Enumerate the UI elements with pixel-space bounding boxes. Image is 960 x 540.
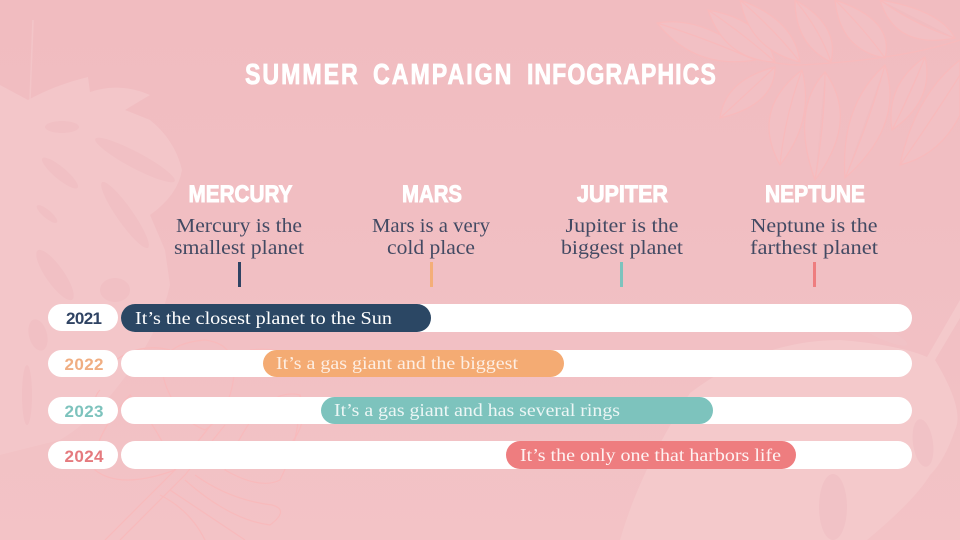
text: Neptune description: Neptune is the xyxy=(750,216,878,237)
text: Mars description: cold place xyxy=(387,238,475,259)
track: 2024 xyxy=(121,441,912,469)
year label: 2023: 2023 xyxy=(64,402,104,421)
title: SUMMER xyxy=(245,57,358,91)
column: Jupiter xyxy=(561,181,684,287)
text: Jupiter description: biggest planet xyxy=(561,238,684,259)
column: Neptune xyxy=(750,181,879,287)
tick: Jupiter xyxy=(620,262,623,287)
background: monstera leaf bottom right xyxy=(620,300,960,540)
track: 2022 xyxy=(121,350,912,377)
title: INFOGRAPHICS xyxy=(527,57,716,91)
column: Mercury xyxy=(174,181,305,287)
title: CAMPAIGN xyxy=(373,57,511,91)
row: 2023 xyxy=(48,397,912,424)
tick: Neptune xyxy=(813,262,816,287)
column: Mars xyxy=(372,181,490,287)
year label: 2024: 2024 xyxy=(64,447,104,466)
heading: Jupiter: JUPITER xyxy=(577,181,668,208)
heading: Mercury: MERCURY xyxy=(188,181,292,208)
heading: Neptune: NEPTUNE xyxy=(765,181,865,208)
background: line leaf branch top right xyxy=(657,0,960,180)
row: 2022 xyxy=(48,350,912,377)
year label: 2023 xyxy=(48,397,118,424)
text: Jupiter description: Jupiter is the xyxy=(566,216,678,237)
tick: Mercury xyxy=(238,262,241,287)
bar: 2023 xyxy=(321,397,713,424)
background: line leaf bottom centre xyxy=(94,340,310,540)
bar: 2023: It’s a gas giant and has several rings xyxy=(334,400,620,420)
row: 2021 xyxy=(48,304,912,332)
year label: 2022: 2022 xyxy=(64,355,104,374)
bar: 2021 xyxy=(121,304,431,332)
bar: 2024 xyxy=(506,441,796,469)
text: Mars description: Mars is a very xyxy=(372,216,490,237)
year label: 2021: 2021 xyxy=(66,309,102,328)
track: 2021 xyxy=(121,304,912,332)
title xyxy=(245,57,716,91)
bar: 2021: It’s the closest planet to the Sun xyxy=(135,308,392,328)
text: Mercury description: smallest planet xyxy=(174,238,305,259)
heading: Mars: MARS xyxy=(402,181,462,208)
tick: Mars xyxy=(430,262,433,287)
text: Neptune description: farthest planet xyxy=(750,238,879,259)
row: 2024 xyxy=(48,441,912,469)
track: 2023 xyxy=(121,397,912,424)
bar: 2022 xyxy=(263,350,564,377)
year label: 2024 xyxy=(48,441,118,469)
year label: 2021 xyxy=(48,304,118,331)
year label: 2022 xyxy=(48,350,118,377)
bar: 2024: It’s the only one that harbors life xyxy=(520,445,781,465)
text: Mercury description: Mercury is the xyxy=(176,216,302,237)
background: monstera leaf left xyxy=(0,20,182,455)
bar: 2022: It’s a gas giant and the biggest xyxy=(276,353,518,373)
